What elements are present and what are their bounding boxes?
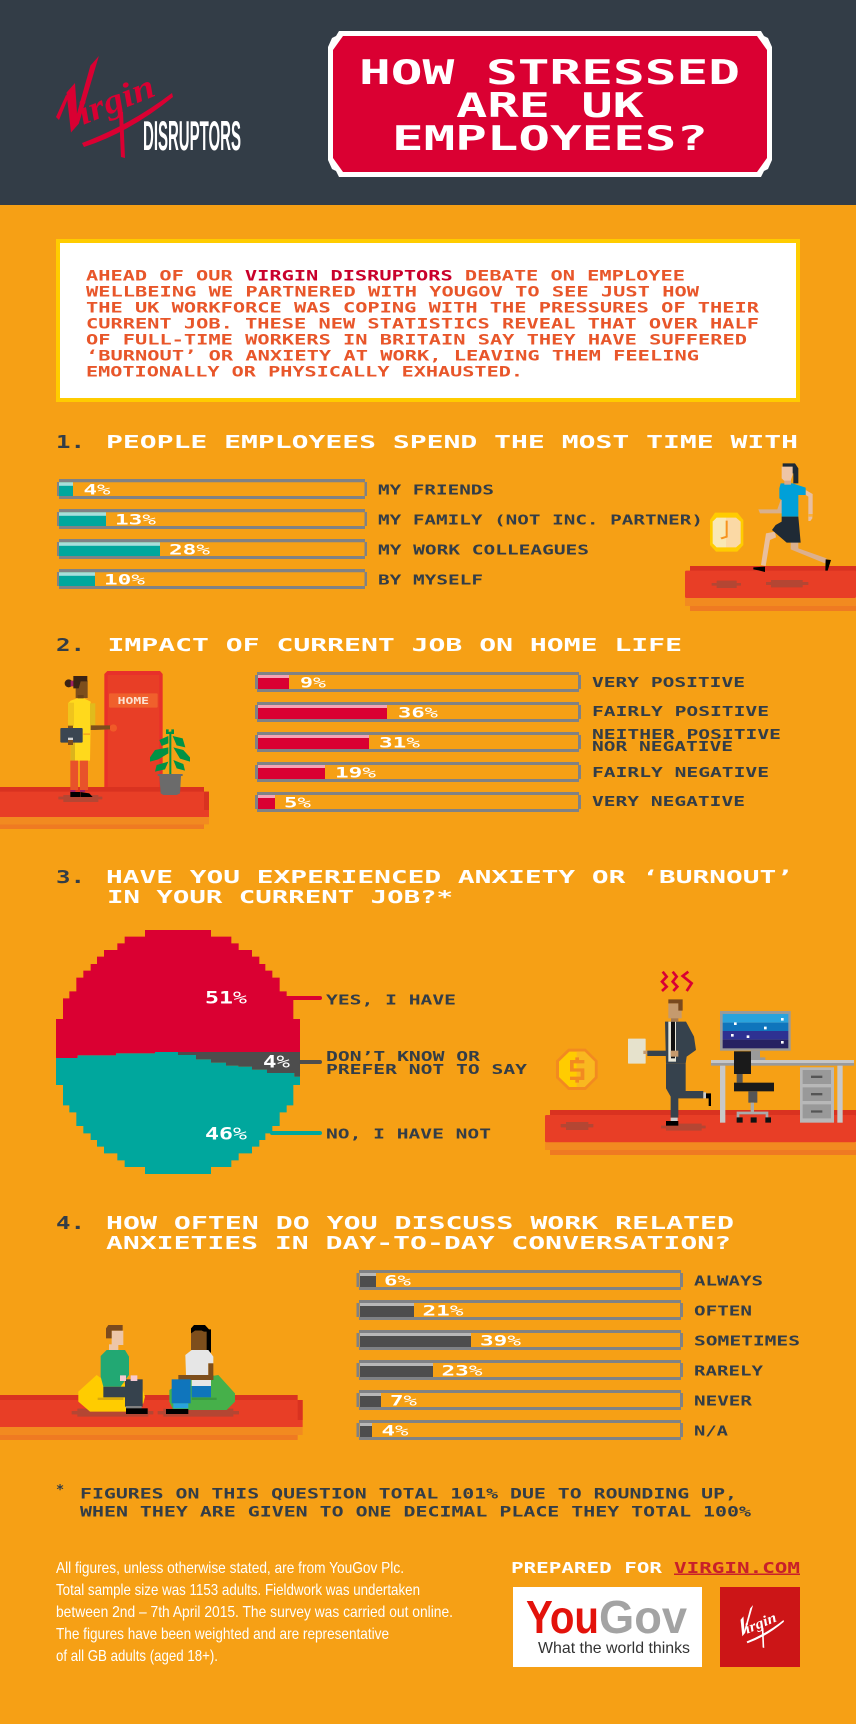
slice: yes 51% [56, 930, 300, 1058]
bar: neither positive nor negative 31% [255, 727, 781, 755]
title box: EMPLOYEES? [392, 119, 708, 159]
door [104, 671, 163, 788]
bar: by myself 10%: 10 % [104, 572, 145, 588]
section 4 heading: HOW OFTEN DO YOU DISCUSS WORK RELATED [106, 1213, 734, 1234]
intro panel: WELLBEING WE PARTNERED WITH YOUGOV TO SEE JUST HOW [86, 284, 699, 300]
logo: YouGov: Gov [599, 1591, 687, 1643]
source note: of all GB adults (aged 18+). [56, 1648, 218, 1665]
section 4 heading: 4. [56, 1213, 85, 1234]
bar: never 7%: 7 % [390, 1394, 417, 1410]
intro panel: EMOTIONALLY OR PHYSICALLY EXHAUSTED. [86, 364, 523, 380]
source note: All figures, unless otherwise stated, are from YouGov Plc. [56, 1560, 404, 1577]
section 1 heading: 1. [56, 432, 85, 453]
bar: very negative 5% [255, 792, 745, 812]
section 1 heading: PEOPLE EMPLOYEES SPEND THE MOST TIME WITH [106, 432, 798, 453]
logo: YouGov: You [526, 1591, 599, 1643]
bar: n/a 4%: 4 % [382, 1424, 409, 1440]
intro panel: CURRENT JOB. THESE NEW STATISTICS REVEAL THAT OVER HALF [86, 316, 759, 332]
value labels: 46 % [205, 1124, 247, 1144]
bar: by myself 10% [57, 569, 483, 589]
bar: fairly negative 19%: 19 % [335, 766, 376, 782]
bar: sometimes 39%: SOMETIMES [694, 1334, 800, 1350]
office chair [734, 1051, 774, 1123]
prepared for credit: PREPARED FOR [511, 1559, 663, 1577]
bar: my family 13%: 13 % [115, 512, 156, 528]
bar: my work colleagues 28%: MY WORK COLLEAGUES [378, 542, 589, 558]
bar: very negative 5%: 5 % [284, 796, 311, 812]
bar: my friends 4%: 4 % [84, 482, 111, 498]
title box: HOW STRESSED [359, 53, 740, 93]
bar: by myself 10%: BY MYSELF [378, 572, 483, 588]
section 3 heading: HAVE YOU EXPERIENCED ANXIETY OR ‘BURNOUT’ [106, 867, 793, 888]
bar: never 7% [356, 1390, 753, 1410]
figure: woman in white t-shirt [166, 1325, 213, 1414]
icon: potted plant [150, 729, 190, 795]
logo: Virgin badge [720, 1587, 800, 1667]
legend labels: NO, I HAVE NOT [326, 1126, 491, 1142]
header band [0, 0, 856, 205]
legend labels: PREFER NOT TO SAY [326, 1062, 528, 1078]
legend labels [326, 992, 528, 1142]
bar: rarely 23%: RARELY [694, 1364, 764, 1380]
bar: very positive 9% [255, 672, 745, 692]
leader lines [270, 996, 322, 1135]
section 3 heading [56, 867, 793, 908]
bar: rarely 23% [356, 1360, 764, 1380]
platform [685, 566, 856, 611]
bar: often 21%: 21 % [422, 1304, 464, 1320]
intro panel [58, 241, 798, 400]
prepared for credit: VIRGIN.COM [674, 1559, 800, 1577]
logo: Virgin badge: irgin [743, 1609, 779, 1638]
bar: my friends 4%: MY FRIENDS [378, 482, 494, 498]
legend labels: DON’T KNOW OR [326, 1049, 481, 1065]
bar chart: how often discuss anxieties [356, 1270, 800, 1440]
bar: neither positive nor negative 31%: 31 % [379, 736, 420, 752]
bar: always 6%: ALWAYS [694, 1274, 763, 1290]
value labels [205, 988, 290, 1144]
illustration: running woman with clock [685, 463, 856, 611]
prepared for credit [511, 1559, 800, 1577]
bar: never 7%: NEVER [694, 1394, 753, 1410]
section 2 heading [56, 635, 682, 656]
illustration: stressed man at desk [545, 972, 856, 1155]
bar: fairly positive 36%: 36 % [398, 706, 438, 722]
platform [0, 1395, 303, 1440]
bar: fairly negative 19% [255, 762, 769, 782]
logo: Virgin Disruptors: V [57, 43, 100, 161]
section 3 heading: IN YOUR CURRENT JOB?* [107, 887, 453, 908]
illustration: two people on beanbags [0, 1325, 303, 1440]
logo: Virgin Disruptors: irgin [72, 68, 160, 132]
stress lines [662, 972, 692, 991]
bar: very positive 9%: 9 % [300, 676, 326, 692]
footnote: * [56, 1482, 64, 1498]
intro panel: AHEAD OF OUR VIRGIN DISRUPTORS DEBATE ON EMPLOYEE [86, 268, 685, 284]
value labels: 51 % [205, 988, 247, 1008]
title box: ARE UK [456, 86, 645, 126]
figure: man in suit with paper [628, 999, 711, 1126]
source note: The figures have been weighted and are representative [56, 1626, 389, 1643]
bar: sometimes 39% [356, 1330, 800, 1350]
section 1 heading [56, 432, 798, 453]
figure: man in green jumper [101, 1325, 148, 1414]
bar: sometimes 39%: 39 % [480, 1334, 521, 1350]
illustration: woman at home door with plant [0, 671, 209, 829]
footnote: WHEN THEY ARE GIVEN TO ONE DECIMAL PLACE THEY TOTAL 100% [80, 1504, 752, 1520]
figure: running woman [753, 463, 831, 572]
intro panel: ‘BURNOUT’ OR ANXIETY AT WORK, LEAVING THEM FEELING [86, 348, 699, 364]
icon: clock [710, 513, 743, 552]
section 2 heading: IMPACT OF CURRENT JOB ON HOME LIFE [108, 635, 682, 656]
legend labels: YES, I HAVE [326, 992, 456, 1008]
platform [545, 1110, 856, 1155]
bar: very positive 9%: VERY POSITIVE [592, 675, 745, 691]
door sign: HOME [118, 696, 149, 707]
bar: fairly positive 36% [255, 702, 769, 722]
slice: no 46% [56, 1052, 300, 1174]
bar: my family 13%: MY FAMILY (NOT INC. PARTNER) [378, 512, 703, 528]
footnote [56, 1482, 752, 1520]
bar chart: people employees spend time with [57, 479, 703, 589]
pixel pie [56, 930, 300, 1174]
source note: Total sample size was 1153 adults. Fieldwork was undertaken [56, 1582, 420, 1599]
desk and computer [711, 1011, 854, 1123]
section 3 heading: 3. [56, 867, 85, 888]
bar: neither positive nor negative 31%: NOR NEGATIVE [592, 739, 733, 755]
bar: fairly positive 36%: FAIRLY POSITIVE [592, 704, 769, 720]
icon: dollar coin [556, 1049, 598, 1090]
section 2 heading: 2. [56, 635, 85, 656]
logo: Virgin Disruptors [56, 43, 241, 161]
bar chart: impact on home life [255, 672, 781, 812]
bar: very negative 5%: VERY NEGATIVE [592, 794, 745, 810]
bar: often 21%: OFTEN [694, 1304, 752, 1320]
header band: DISRUPTORS [143, 112, 241, 159]
intro panel: OF FULL-TIME WORKERS IN BRITAIN SAY THEY HAVE SUFFERED [86, 332, 747, 348]
bar: often 21% [356, 1300, 752, 1320]
pie chart: anxiety or burnout [56, 930, 528, 1174]
bar: my family 13% [57, 509, 703, 529]
section 4 heading [56, 1213, 734, 1254]
bar: fairly negative 19%: FAIRLY NEGATIVE [592, 765, 769, 781]
bar: my work colleagues 28% [57, 539, 589, 559]
intro panel: THE UK WORKFORCE WAS COPING WITH THE PRESSURES OF THEIR [86, 300, 759, 316]
section 4 heading: ANXIETIES IN DAY-TO-DAY CONVERSATION? [106, 1233, 731, 1254]
title box [328, 31, 772, 177]
source note [56, 1560, 453, 1665]
bar: my friends 4% [57, 479, 494, 499]
bar: my work colleagues 28%: 28 % [169, 542, 210, 558]
footnote: FIGURES ON THIS QUESTION TOTAL 101% DUE TO ROUNDING UP, [80, 1486, 737, 1502]
bar: rarely 23%: 23 % [442, 1364, 483, 1380]
slice: don't know 4% [178, 1052, 300, 1077]
source note: between 2nd – 7th April 2015. The survey was carried out online. [56, 1604, 453, 1621]
bar: always 6%: 6 % [384, 1274, 411, 1290]
bar: always 6% [356, 1270, 763, 1290]
logo: YouGov [513, 1587, 702, 1667]
figure: woman with folder [60, 676, 110, 797]
bar: neither positive nor negative 31%: NEITHER POSITIVE [592, 727, 781, 743]
bar: n/a 4%: N/A [694, 1424, 728, 1440]
beanbags [78, 1375, 235, 1412]
logo: Virgin badge: V [736, 1598, 754, 1649]
logo: YouGov: What the world thinks [538, 1640, 690, 1657]
platform [0, 787, 209, 829]
bar: n/a 4% [356, 1420, 728, 1440]
value labels: 4% [263, 1052, 290, 1072]
